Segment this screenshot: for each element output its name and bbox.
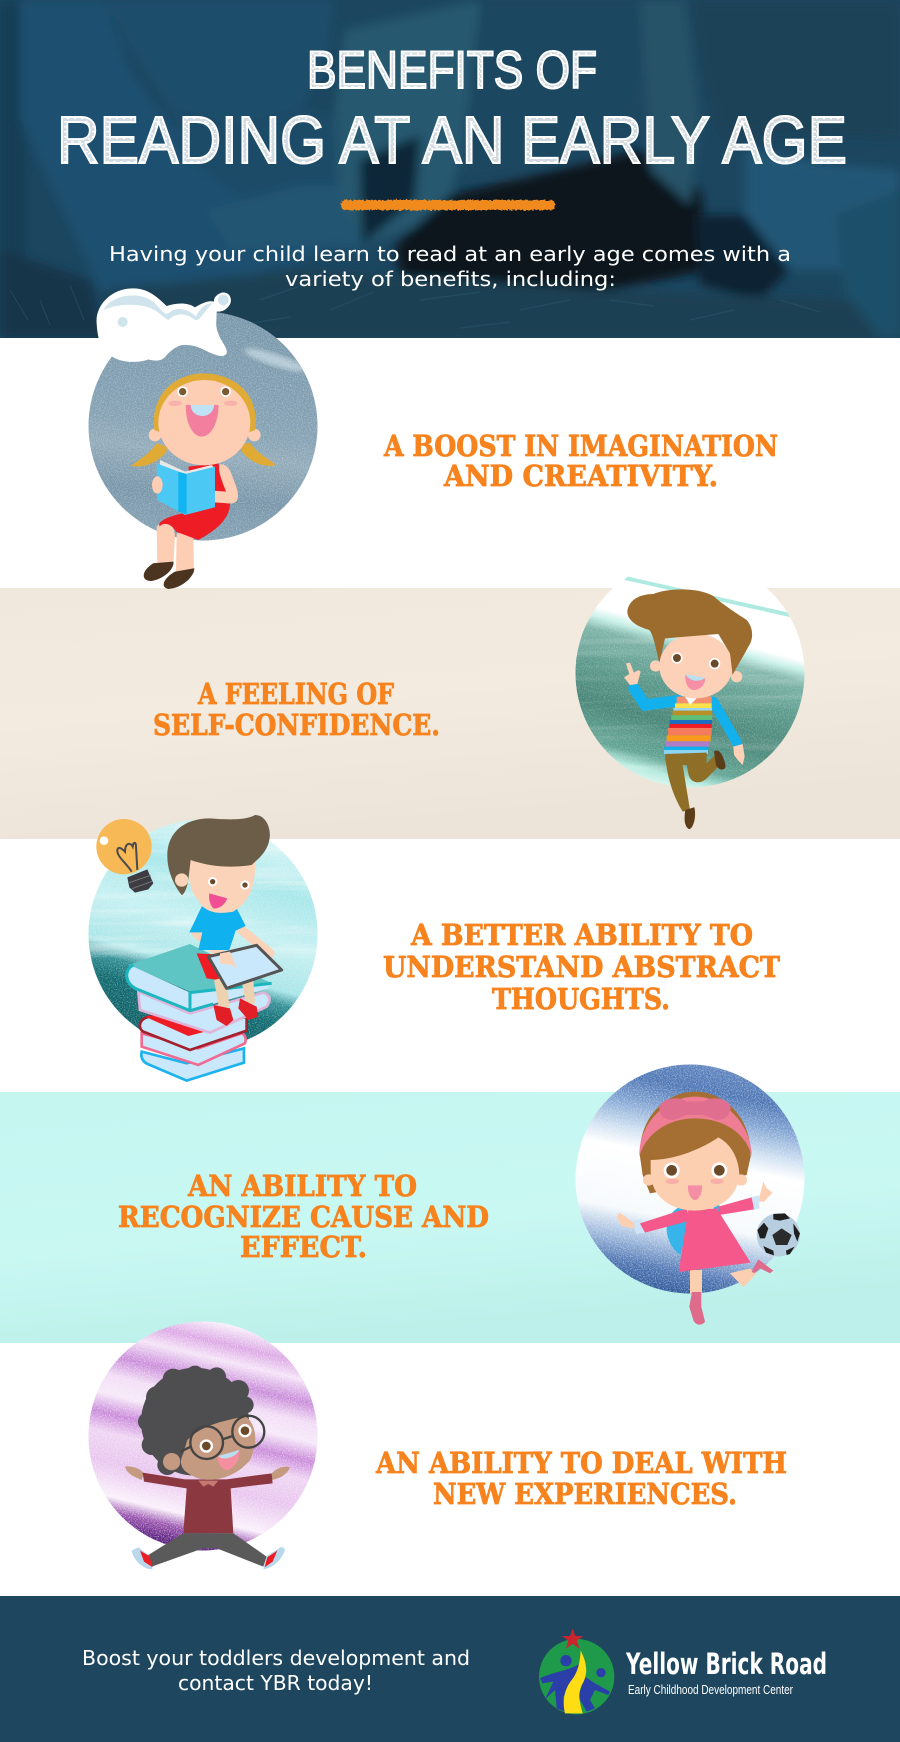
benefit heading 1: AND CREATIVITY. — [443, 459, 718, 493]
panel: new experiences band — [0, 1343, 900, 1596]
headband — [639, 1097, 752, 1157]
hair — [640, 1092, 751, 1193]
cuffs — [633, 1195, 759, 1234]
shoes — [685, 751, 726, 829]
benefit heading 4: AN ABILITY TO — [187, 1169, 417, 1203]
benefit heading 2 — [153, 677, 440, 742]
ears — [643, 1174, 747, 1186]
hands — [617, 1182, 773, 1228]
mouth — [186, 405, 218, 437]
panel: imagination band — [0, 338, 900, 588]
textured circle 4 — [575, 1064, 805, 1294]
illustration: boy with glasses sitting — [125, 1366, 290, 1569]
logo emblem — [539, 1629, 614, 1714]
panel: footer band — [0, 1596, 900, 1742]
intro text: variety of benefits, including: — [285, 267, 616, 291]
red book — [140, 1017, 247, 1050]
logo tagline: Early Childhood Development Center — [628, 1682, 794, 1697]
panel: self-confidence band — [0, 588, 900, 839]
cheeks — [168, 401, 237, 406]
footer call to action: Boost your toddlers development and — [82, 1646, 470, 1670]
face — [659, 634, 733, 698]
benefit heading 5: AN ABILITY TO DEAL WITH — [375, 1446, 787, 1480]
orange brush underline — [341, 200, 555, 210]
eyes — [671, 652, 720, 669]
face — [651, 1137, 739, 1211]
cheeks — [666, 1179, 724, 1184]
intro text: Having your child learn to read at an early age comes with a — [109, 242, 791, 266]
face — [181, 1416, 255, 1480]
sweater — [143, 1473, 273, 1533]
panel: cause and effect band — [0, 1092, 900, 1343]
legs — [690, 1268, 757, 1293]
footer call to action — [82, 1646, 470, 1695]
arms — [197, 930, 270, 958]
eyes — [664, 1162, 727, 1178]
eyes — [200, 1424, 252, 1453]
soccer ball — [757, 1213, 800, 1257]
textured circle 3 — [88, 819, 318, 1049]
textured circle 2 — [575, 558, 805, 788]
collar — [198, 1481, 218, 1487]
legs — [214, 977, 255, 1010]
mouth — [685, 674, 705, 690]
trousers — [148, 1533, 267, 1567]
bow — [659, 1098, 731, 1120]
ear — [175, 873, 188, 887]
benefit heading 1 — [383, 429, 778, 493]
bottom book — [141, 1048, 244, 1081]
boots — [689, 1259, 773, 1325]
face — [158, 380, 250, 465]
benefit heading 4: RECOGNIZE CAUSE AND — [118, 1200, 489, 1234]
dress — [679, 1208, 751, 1272]
benefit heading 3 — [383, 918, 780, 1016]
glasses — [181, 1416, 264, 1459]
textured circle 1 — [88, 311, 318, 541]
benefit heading 2: A FEELING OF — [197, 677, 394, 711]
panel: abstract thoughts band — [0, 839, 900, 1092]
title line: benefits of: BENEFITS OF — [307, 41, 597, 100]
sleeves — [640, 1197, 754, 1233]
backpack — [667, 1205, 721, 1255]
ears — [149, 429, 261, 441]
ears — [650, 660, 742, 682]
mouth — [688, 1185, 702, 1200]
hair — [154, 373, 256, 433]
eyes — [208, 877, 250, 890]
braids — [131, 443, 276, 467]
hair — [627, 589, 752, 675]
hand on tablet — [220, 952, 237, 968]
benefit heading 4 — [118, 1169, 489, 1264]
eyes — [177, 386, 231, 397]
footer call to action: contact YBR today! — [178, 1671, 373, 1695]
mouth — [209, 893, 227, 908]
benefit heading 4: EFFECT. — [240, 1230, 367, 1264]
hair — [167, 815, 270, 895]
left hand — [152, 476, 163, 494]
hands — [125, 1466, 290, 1480]
teal top book — [128, 944, 272, 992]
legs — [157, 523, 194, 572]
benefit heading 5 — [375, 1446, 787, 1511]
mouth — [218, 1450, 239, 1470]
logo: yellow brick road — [539, 1629, 827, 1714]
illustration: girl kicking a ball — [617, 1092, 800, 1325]
face — [189, 860, 255, 913]
sleeves — [634, 688, 737, 743]
striped sweater — [664, 697, 712, 754]
illustration: boy on books with tablet — [96, 815, 282, 1081]
benefit heading 1: A BOOST IN IMAGINATION — [383, 429, 778, 463]
trousers — [665, 753, 718, 812]
benefit heading 3: THOUGHTS. — [492, 982, 670, 1016]
shoes — [132, 1547, 285, 1569]
afro hair — [138, 1366, 254, 1476]
dress skirt — [159, 503, 230, 540]
benefit heading 5: NEW EXPERIENCES. — [433, 1477, 737, 1511]
intro text — [109, 242, 791, 291]
hands — [624, 663, 745, 765]
title — [57, 41, 847, 178]
book stack — [125, 944, 272, 1081]
illustration: boy jumping — [624, 589, 752, 829]
header photo background — [0, 0, 900, 338]
shirt — [189, 907, 246, 950]
shoes — [144, 562, 194, 589]
pink book — [142, 1033, 246, 1065]
light bulb — [96, 819, 153, 893]
ear — [163, 1453, 180, 1470]
shoes — [213, 998, 258, 1026]
textured circle 5 — [88, 1321, 318, 1551]
shorts — [197, 953, 230, 980]
tablet — [208, 945, 282, 988]
benefit heading 3: A BETTER ABILITY TO — [410, 918, 753, 952]
book — [157, 460, 215, 515]
benefit heading 3: UNDERSTAND ABSTRACT — [383, 950, 780, 984]
thought cloud — [97, 288, 231, 362]
benefit heading 2: SELF-CONFIDENCE. — [153, 708, 440, 742]
torso and arm — [188, 463, 228, 510]
lilac book — [138, 992, 270, 1033]
illustration: girl reading with thought cloud — [97, 288, 276, 589]
